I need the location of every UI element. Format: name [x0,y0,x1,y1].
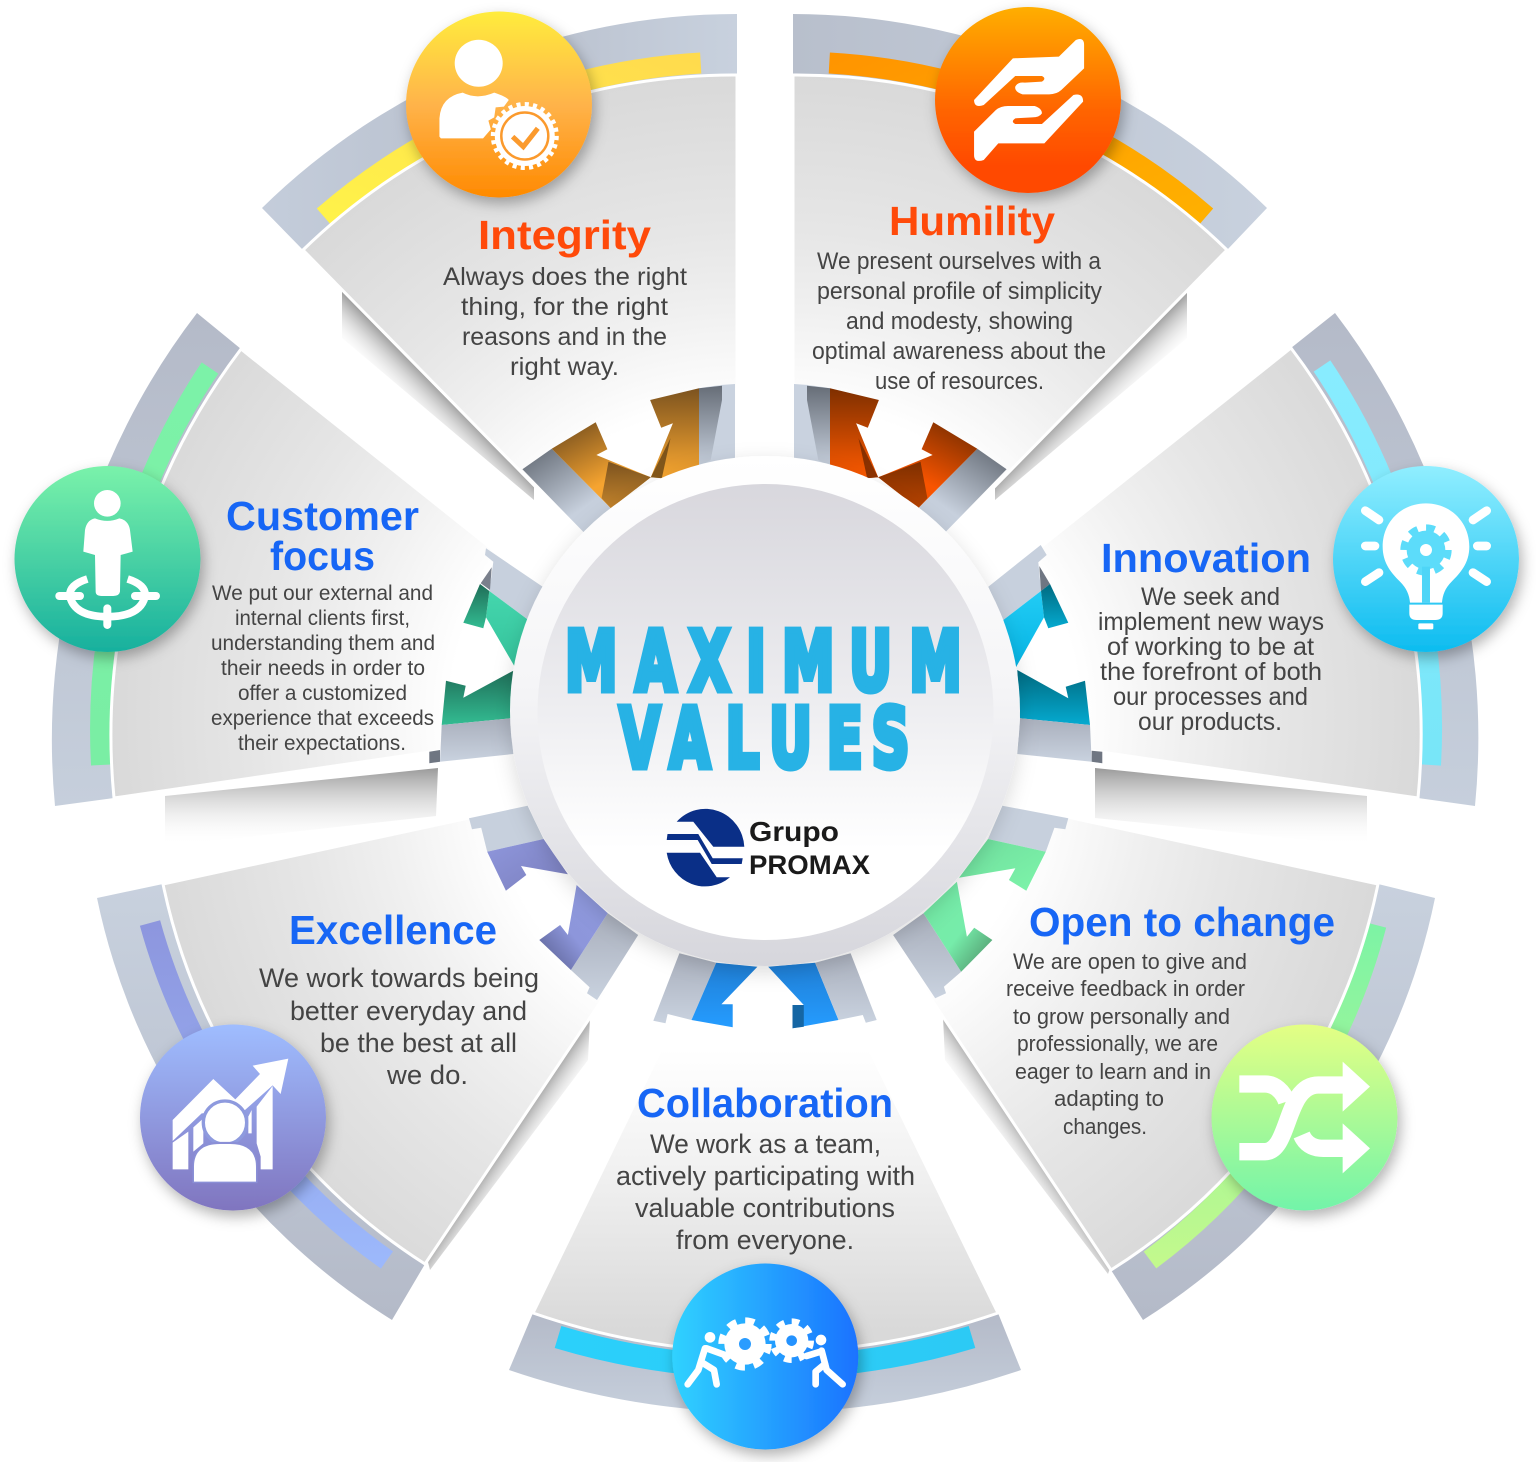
text: humility: We present ourselves with a [817,248,1102,275]
text: integrity: right way. [510,353,619,381]
text: integrity: reasons and in the [462,323,667,351]
panel: collaboration [509,953,1021,1450]
title: maximum values: MAXIMUM [565,615,962,710]
text: innovation: the forefront of both [1100,658,1322,686]
text: customer focus: offer a customized [238,682,407,705]
icon: two hands [935,7,1121,193]
text: open to change: adapting to [1054,1086,1164,1111]
text: collaboration [616,1129,915,1255]
arrows: open to change [893,806,1068,998]
arrows: excellence [469,806,638,1000]
text: innovation: of working to be at [1107,633,1314,661]
text: integrity [443,263,687,381]
icon: light bulb with gear [1333,466,1519,652]
heading: customer focus: focus [270,533,375,579]
heading: excellence: Excellence [289,907,497,953]
icon: shuffle arrows [1212,1024,1398,1210]
panel: open to change [893,781,1435,1320]
text: humility: and modesty, showing [846,308,1073,335]
icon: person on target [14,466,200,652]
heading: innovation: Innovation [1101,535,1311,581]
heading: customer focus [226,493,419,579]
text: collaboration: We work as a team, [650,1129,881,1159]
text: customer focus: internal clients first, [235,607,410,630]
text: humility: optimal awareness about the [812,338,1106,365]
icon: growth chart with person [140,1024,326,1210]
text: humility: use of resources. [875,368,1044,395]
text: open to change: changes. [1063,1114,1147,1139]
arrows: humility [794,384,1007,532]
panel: humility [793,7,1267,692]
heading: customer focus: Customer [226,493,419,539]
center disc [510,456,1020,966]
text: customer focus: experience that exceeds [211,707,434,730]
text: collaboration: from everyone. [676,1225,854,1255]
heading: integrity: Integrity [478,212,651,258]
text: open to change: receive feedback in order [1006,976,1245,1001]
logo: grupo promax: Grupo [749,816,839,847]
text: customer focus [211,582,435,755]
panel: integrity [262,12,737,692]
text: excellence: We work towards being [259,963,539,993]
arrows: innovation [988,545,1102,763]
heading: collaboration: Collaboration [637,1080,893,1126]
text: excellence: be the best at all [320,1028,517,1058]
text: customer focus: We put our external and [212,582,433,605]
title: maximum values: VALUES [620,692,909,787]
panel: innovation [832,313,1519,846]
text: collaboration: valuable contributions [635,1193,895,1223]
panel: excellence [97,781,640,1320]
arrows: collaboration [653,953,877,1028]
text: open to change: eager to learn and in [1015,1059,1211,1084]
text: innovation: We seek and [1141,583,1280,611]
text: customer focus: understanding them and [211,632,435,655]
text: open to change [1006,949,1247,1139]
text: excellence: we do. [386,1060,468,1090]
text: innovation: our products. [1138,708,1282,736]
text: collaboration: actively participating with [616,1161,915,1191]
text: excellence [259,963,539,1090]
text: open to change: professionally, we are [1017,1031,1218,1056]
text: open to change: to grow personally and [1013,1004,1230,1029]
text: humility [812,248,1106,395]
icon: person with badge [406,12,592,198]
icon: people turning gears [672,1264,858,1450]
logo: grupo promax: PROMAX [749,850,870,880]
arrows: customer focus [429,548,543,763]
logo: grupo promax [667,809,870,886]
heading: open to change: Open to change [1029,899,1335,945]
title: maximum values [565,615,962,787]
text: excellence: better everyday and [290,996,527,1026]
text: open to change: We are open to give and [1013,949,1247,974]
arrows: integrity [522,384,735,532]
text: customer focus: their expectations. [238,732,406,755]
text: innovation [1098,583,1324,736]
text: integrity: thing, for the right [461,293,668,321]
text: customer focus: their needs in order to [221,657,425,680]
text: integrity: Always does the right [443,263,687,291]
text: humility: personal profile of simplicity [817,278,1102,305]
text: innovation: implement new ways [1098,608,1324,636]
heading: humility: Humility [889,198,1055,244]
panel: customer focus [14,313,698,846]
text: innovation: our processes and [1113,683,1308,711]
